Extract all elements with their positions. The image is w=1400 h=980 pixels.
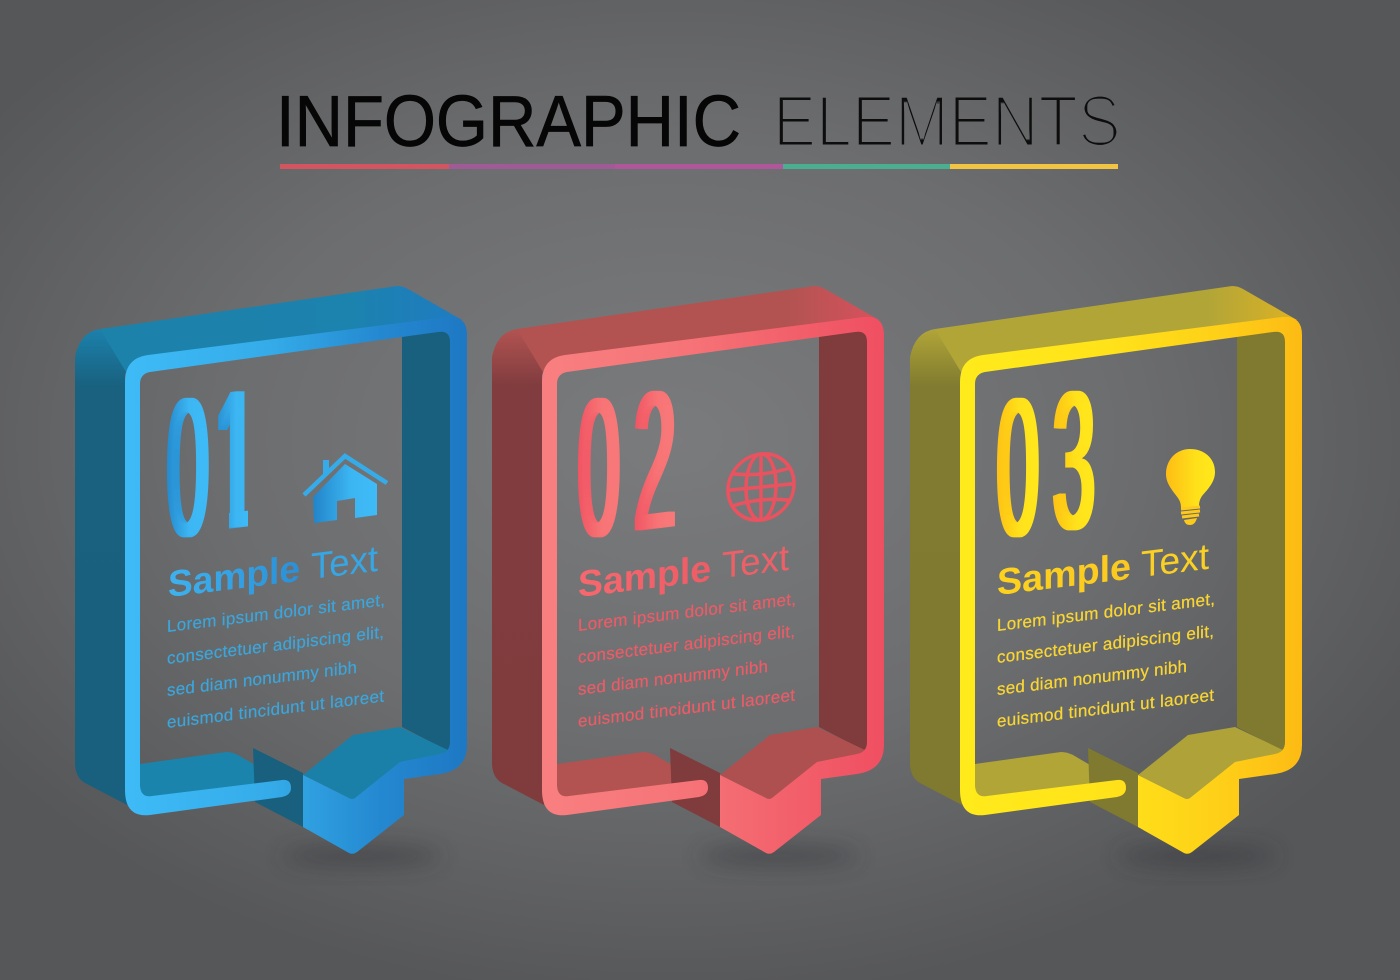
3D frame [910,286,1302,854]
number 03: 3 [1053,348,1095,573]
heading: sample text: Text [1141,535,1210,585]
3D frame [492,286,884,854]
body text: consectetuer adipiscing elit, [167,623,384,668]
heading: sample text: Sample [578,547,711,605]
body text [578,589,796,731]
body text: sed diam nonummy nibh [578,657,768,699]
panel: 02 red [492,286,884,866]
number 01: 0 [167,355,209,580]
icon: light bulb [1166,449,1215,525]
heading: sample text: Sample [997,545,1131,603]
number 01: 1 [215,347,257,572]
body text: Lorem ipsum dolor sit amet, [997,589,1215,635]
body text: consectetuer adipiscing elit, [997,622,1214,667]
body text: consectetuer adipiscing elit, [578,622,795,667]
heading: sample text: Text [311,537,379,587]
3D frame [75,286,467,854]
heading: sample text: Text [722,536,790,586]
number 02: 2 [634,348,676,573]
body text: sed diam nonummy nibh [997,657,1187,699]
icon: house [304,456,387,523]
number 01 [166,391,248,538]
icon: globe [728,451,794,523]
number 02 [578,348,676,580]
number 03 [997,348,1095,580]
drop shadow [699,846,859,866]
body text [167,590,385,732]
drop shadow [1117,846,1277,866]
body text: Lorem ipsum dolor sit amet, [167,590,385,636]
heading: sample text [578,536,790,605]
body text [997,589,1215,731]
number 03: 0 [997,355,1039,580]
multicolour title underline [280,164,1118,169]
body text: euismod tincidunt ut laoreet [578,686,795,731]
panel: 01 blue [75,286,467,866]
title word: elements: ELEMENTS [773,82,1121,162]
heading: sample text: Sample [168,547,300,605]
title [276,82,1121,162]
drop shadow [282,846,442,866]
body text: Lorem ipsum dolor sit amet, [578,589,796,635]
panel: 03 yellow [910,286,1302,866]
number 02: 0 [578,355,620,580]
heading: sample text [997,535,1210,603]
body text: sed diam nonummy nibh [167,658,357,700]
body text: euismod tincidunt ut laoreet [997,686,1214,731]
heading: sample text [168,537,379,605]
body text: euismod tincidunt ut laoreet [167,687,384,732]
title word: infographic: INFOGRAPHIC [276,82,741,162]
